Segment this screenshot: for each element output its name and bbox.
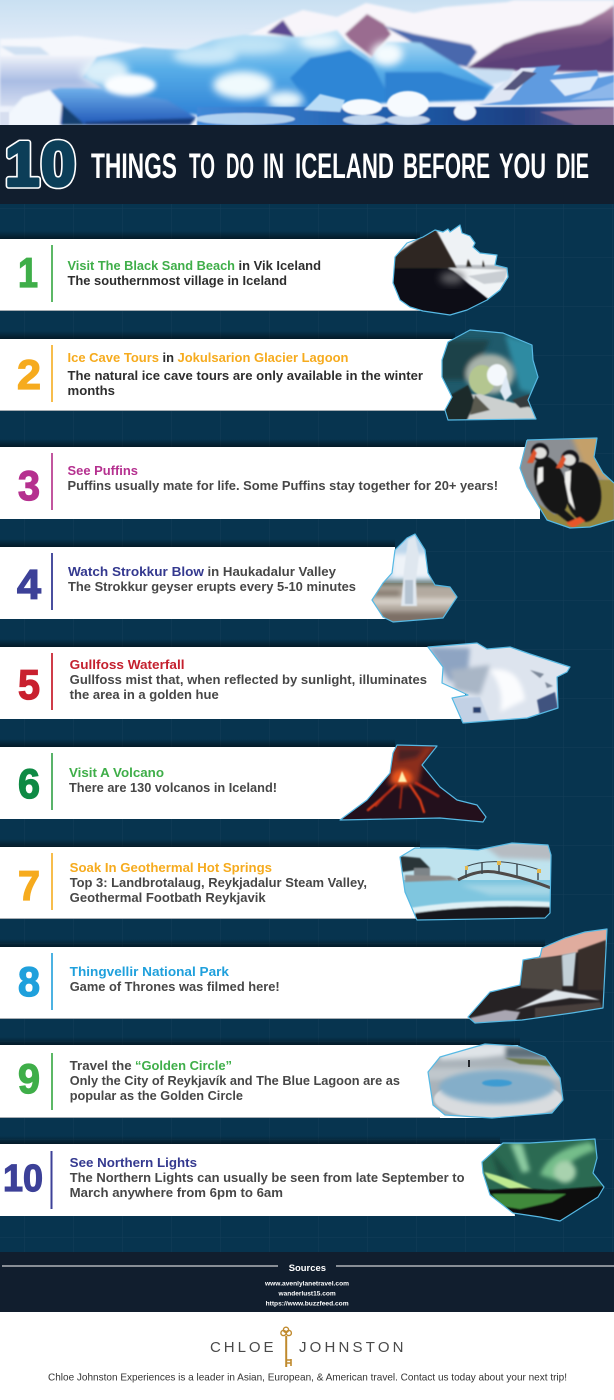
panel: item 10 northern lights <box>0 1136 515 1216</box>
panel: item 8 Thingvellir national park <box>0 939 545 1019</box>
text block 2 <box>68 350 423 398</box>
number 6: 6 <box>18 760 40 807</box>
logo text: JOHNSTON <box>299 1339 404 1356</box>
text block 3: See Puffins <box>68 463 138 478</box>
text block 9: popular as the Golden Circle <box>70 1088 243 1103</box>
page background panel <box>0 204 614 1252</box>
text block 5: Gullfoss Waterfall <box>70 657 184 672</box>
number 3: 3 <box>18 462 40 509</box>
number 9: 9 <box>18 1055 40 1102</box>
number 1: 1 <box>18 249 38 296</box>
text block 2: months <box>68 383 115 398</box>
title text: IN <box>263 147 284 186</box>
panel: item 9 golden circle <box>0 1037 520 1118</box>
text block 5 <box>70 657 427 702</box>
text block 7: Soak In Geothermal Hot Springs <box>70 860 272 875</box>
header photo: glacier lagoon with icebergs and mountains <box>0 0 614 126</box>
text block 5: the area in a golden hue <box>70 687 219 702</box>
title text <box>91 147 589 186</box>
text block 9: “Golden Circle” <box>135 1058 232 1073</box>
text block 4: in Haukadalur Valley <box>208 564 337 579</box>
text block 2: in <box>162 350 174 365</box>
title text: THINGS <box>91 147 177 186</box>
title text: ICELAND <box>295 147 394 186</box>
number 5: 5 <box>18 661 40 708</box>
sources list: www.avenlylanetravel.com <box>264 1281 349 1288</box>
icon: golden key <box>281 1327 291 1367</box>
text block 1 <box>68 258 321 288</box>
icon: Thingvellir waterfall photo <box>465 925 612 1025</box>
big outlined number 10: 10 <box>5 130 75 200</box>
big outlined number 10: 10 <box>5 130 75 200</box>
text block 8: Thingvellir National Park <box>70 964 230 979</box>
panel: item 3 see puffins <box>0 439 540 519</box>
number 8: 8 <box>18 958 40 1005</box>
panel: item 2 ice cave tours <box>0 331 455 411</box>
icon: puffins photo <box>519 437 614 529</box>
title text: YOU <box>499 147 546 186</box>
text block 9: Travel the <box>70 1058 132 1073</box>
text block 2: Ice Cave Tours <box>68 350 159 365</box>
sources heading: Sources <box>289 1263 326 1274</box>
title text: TO <box>189 147 215 186</box>
icon: ice cave photo <box>441 329 539 421</box>
icon: blue lagoon hot spring photo <box>399 842 552 921</box>
title text: DO <box>226 147 254 186</box>
text block 2: Jokulsarion Glacier Lagoon <box>178 350 349 365</box>
sources list <box>264 1281 349 1308</box>
text block 4 <box>68 564 356 594</box>
logo text: CHLOE <box>210 1339 274 1356</box>
icon: northern lights photo <box>481 1138 605 1222</box>
text block 7: Top 3: Landbrotalaug, Reykjadalur Steam Valley, <box>70 875 367 890</box>
text block 9 <box>70 1058 400 1103</box>
icon: geothermal pool photo <box>427 1043 564 1119</box>
text block 6 <box>69 765 277 795</box>
text block 7 <box>70 860 367 905</box>
text block 10: See Northern Lights <box>70 1155 197 1170</box>
number 2: 2 <box>17 351 41 398</box>
title band <box>0 125 614 204</box>
text block 9: Only the City of Reykjavík and The Blue Lagoon are as <box>70 1073 400 1088</box>
text block 2: The natural ice cave tours are only available in the winter <box>68 368 423 383</box>
icon: Strokkur geyser photo <box>371 533 458 623</box>
number 4: 4 <box>17 561 42 608</box>
panel: footer logo <box>0 1312 614 1400</box>
title text: DIE <box>556 147 589 186</box>
panel: item 6 visit a volcano <box>0 739 395 819</box>
number 10: 10 <box>3 1158 43 1200</box>
text block 6: Visit A Volcano <box>69 765 164 780</box>
logo text <box>210 1339 404 1356</box>
icon: black sand beach photo <box>392 224 509 316</box>
sources list: https://www.buzzfeed.com <box>266 1301 349 1308</box>
panel: item 1 black sand beach <box>0 231 420 311</box>
icon: Gullfoss waterfall photo <box>427 642 571 724</box>
footer text: Chloe Johnston Experiences is a leader in Asian, European, & American travel. Contact us today about your next trip! <box>48 1372 567 1384</box>
panel: item 5 Gullfoss waterfall <box>0 639 465 719</box>
text block 8: Game of Thrones was filmed here! <box>70 979 280 994</box>
text block 6: There are 130 volcanos in Iceland! <box>69 780 277 795</box>
title text: BEFORE <box>403 147 490 186</box>
number 7: 7 <box>18 862 40 909</box>
text block 10: The Northern Lights can usually be seen from late September to <box>70 1170 465 1185</box>
text block 3 <box>68 463 498 493</box>
text block 10 <box>70 1155 465 1200</box>
text block 7: Geothermal Footbath Reykjavik <box>70 890 266 905</box>
sources list: wanderlust15.com <box>278 1291 336 1298</box>
panel: sources <box>0 1252 614 1312</box>
text block 5: Gullfoss mist that, when reflected by sunlight, illuminates <box>70 672 427 687</box>
text block 10: March anywhere from 6pm to 6am <box>70 1185 283 1200</box>
text block 4: Watch Strokkur Blow <box>68 564 205 579</box>
text block 1: in Vik Iceland <box>238 258 321 273</box>
text block 4: The Strokkur geyser erupts every 5-10 minutes <box>68 579 356 594</box>
icon: volcano photo <box>339 744 487 823</box>
text block 1: The southernmost village in Iceland <box>68 273 287 288</box>
text block 8 <box>70 964 280 994</box>
text block 1: Visit The Black Sand Beach <box>68 258 235 273</box>
panel: item 4 watch Strokkur <box>0 539 395 619</box>
text block 3: Puffins usually mate for life. Some Puffins stay together for 20+ years! <box>68 478 498 493</box>
panel: item 7 geothermal hot springs <box>0 839 420 919</box>
